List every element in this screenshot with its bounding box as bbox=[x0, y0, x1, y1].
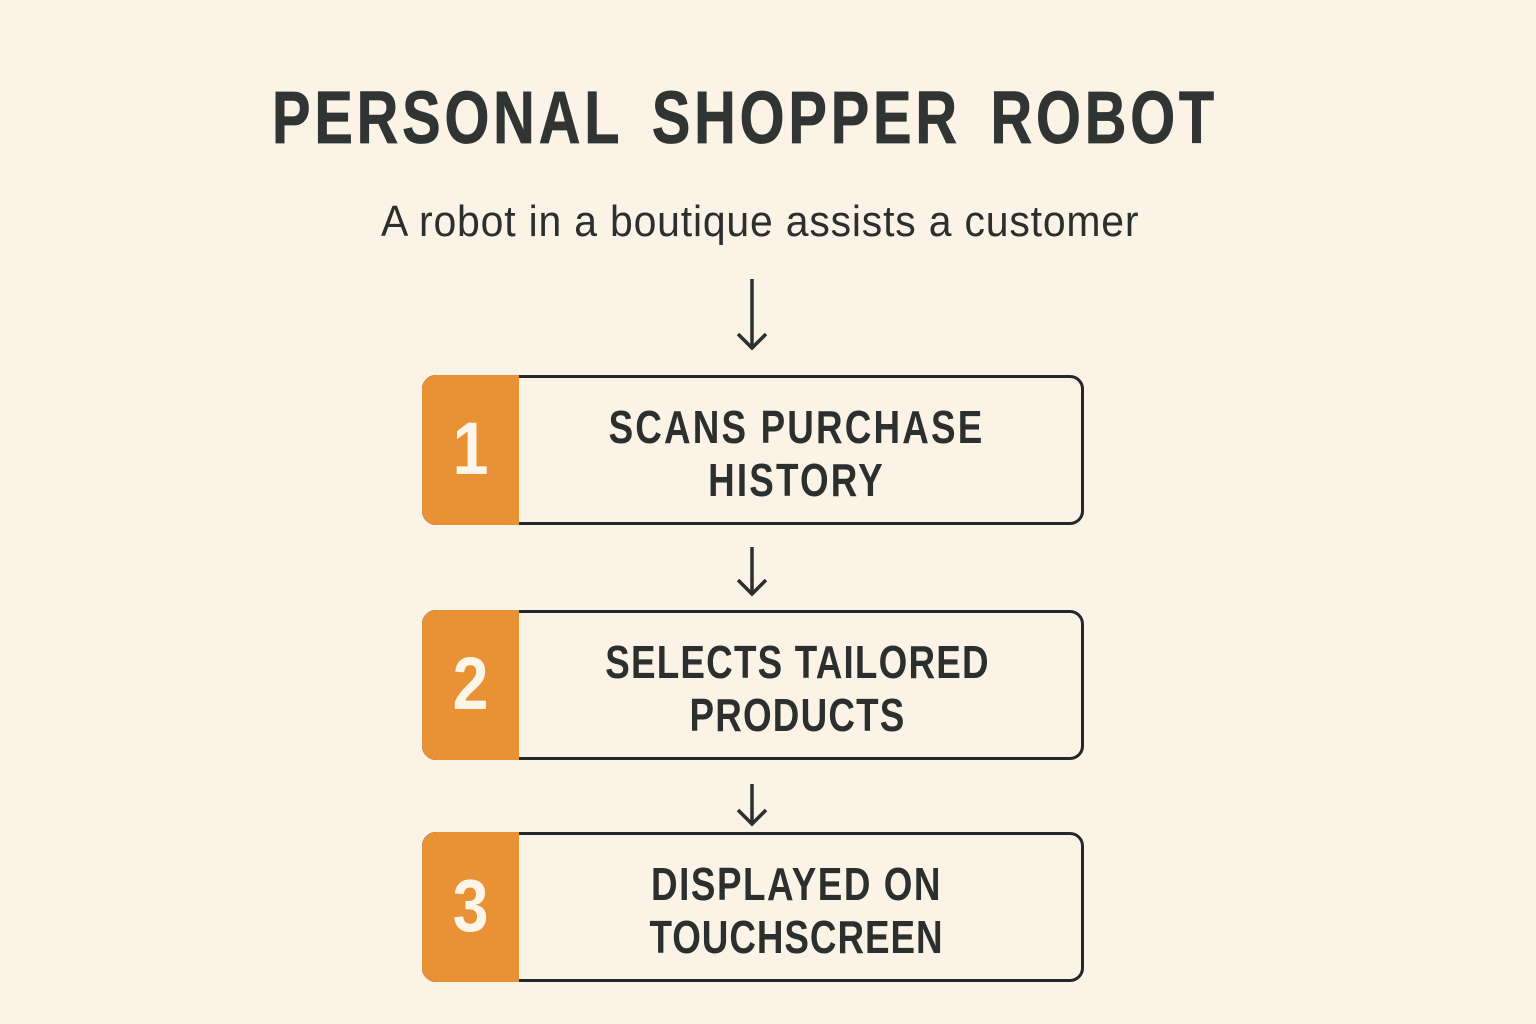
step 1 number: 1 bbox=[453, 407, 488, 490]
step 2 text bbox=[605, 636, 990, 741]
subtitle: A robot in a boutique assists a customer bbox=[381, 197, 1139, 246]
step 3 text bbox=[649, 858, 944, 963]
arrow: step 1 to step 2 bbox=[736, 547, 768, 596]
arrow: step 2 to step 3 bbox=[736, 784, 768, 826]
step 2 number: 2 bbox=[453, 642, 488, 725]
title: PERSONAL SHOPPER ROBOT bbox=[272, 76, 1218, 159]
step 3 text: DISPLAYED ON bbox=[651, 858, 942, 910]
step 2 text: PRODUCTS bbox=[689, 689, 906, 741]
step 2 text: SELECTS TAILORED bbox=[605, 636, 990, 688]
arrow: subtitle to step 1 bbox=[736, 279, 768, 350]
panel: step 3 bbox=[422, 832, 1084, 982]
step 1 text: HISTORY bbox=[708, 454, 885, 506]
step 1 text: SCANS PURCHASE bbox=[609, 401, 984, 453]
step 1 text bbox=[609, 401, 984, 506]
step 2 number bbox=[422, 610, 519, 760]
step 3 number: 3 bbox=[453, 864, 488, 947]
step 3 text: TOUCHSCREEN bbox=[649, 911, 944, 963]
step 1 number bbox=[422, 375, 519, 525]
panel: step 2 bbox=[422, 610, 1084, 760]
step 3 number bbox=[422, 832, 519, 982]
panel: step 1 bbox=[422, 375, 1084, 525]
